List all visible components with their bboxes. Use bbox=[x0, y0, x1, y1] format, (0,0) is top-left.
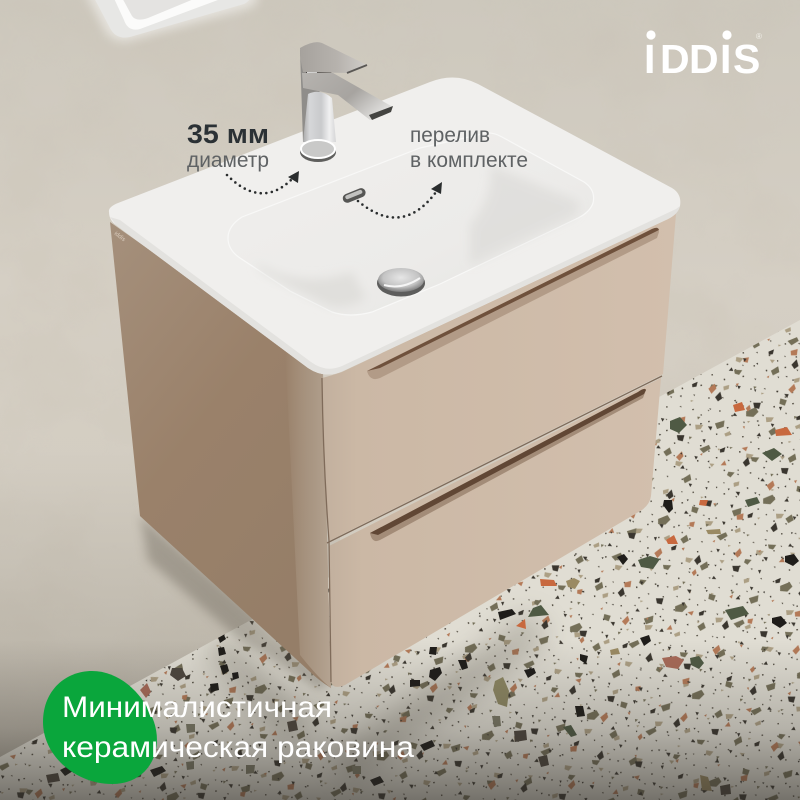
callout: overflow included: в комплекте bbox=[410, 149, 528, 172]
arrow: to faucet hole bbox=[227, 171, 299, 193]
drain bbox=[377, 268, 425, 296]
overflow bbox=[341, 187, 367, 204]
callout: 35 mm diameter bbox=[187, 119, 269, 172]
callout: 35 mm diameter: 35 мм bbox=[187, 119, 269, 149]
title: керамическая раковина bbox=[62, 731, 414, 764]
drawer gap bbox=[322, 376, 662, 682]
side logo mark: iddis bbox=[113, 231, 126, 243]
arrow: from overflow bbox=[358, 182, 442, 217]
lower handle groove bbox=[370, 389, 646, 541]
lower drawer bbox=[329, 378, 661, 687]
callout: overflow included bbox=[410, 124, 528, 172]
faucet column bbox=[303, 92, 336, 142]
cabinet shadow on floor bbox=[215, 625, 540, 770]
title bbox=[62, 691, 414, 764]
mirror with glow bbox=[84, 0, 258, 41]
title: Минималистичная bbox=[62, 691, 332, 724]
logo: iddis: IDDIS bbox=[644, 36, 760, 82]
bottom vignette bbox=[0, 640, 800, 800]
faucet base ring bbox=[300, 140, 336, 162]
upper drawer bbox=[322, 214, 676, 541]
green blob bbox=[43, 671, 157, 784]
faucet body bbox=[300, 50, 322, 142]
vanity cabinet bbox=[110, 214, 676, 688]
faucet neck bbox=[306, 60, 332, 88]
cabinet wall shadow bbox=[140, 515, 330, 690]
cabinet rounded corner strip bbox=[285, 345, 331, 688]
cabinet side panel bbox=[110, 222, 331, 688]
faucet lever bbox=[300, 42, 367, 73]
chrome faucet bbox=[300, 42, 393, 162]
callout: 35 mm diameter: диаметр bbox=[187, 149, 269, 172]
sink basin bbox=[228, 133, 594, 315]
faucet spout bbox=[302, 73, 393, 120]
logo: iddis: ® bbox=[756, 32, 762, 41]
ceramic sink bbox=[109, 77, 680, 375]
large terrazzo chips bbox=[46, 383, 799, 795]
terrazzo floor bbox=[0, 320, 800, 800]
callout: overflow included: перелив bbox=[410, 124, 490, 147]
upper handle groove bbox=[367, 228, 659, 379]
sink top bbox=[109, 77, 680, 375]
